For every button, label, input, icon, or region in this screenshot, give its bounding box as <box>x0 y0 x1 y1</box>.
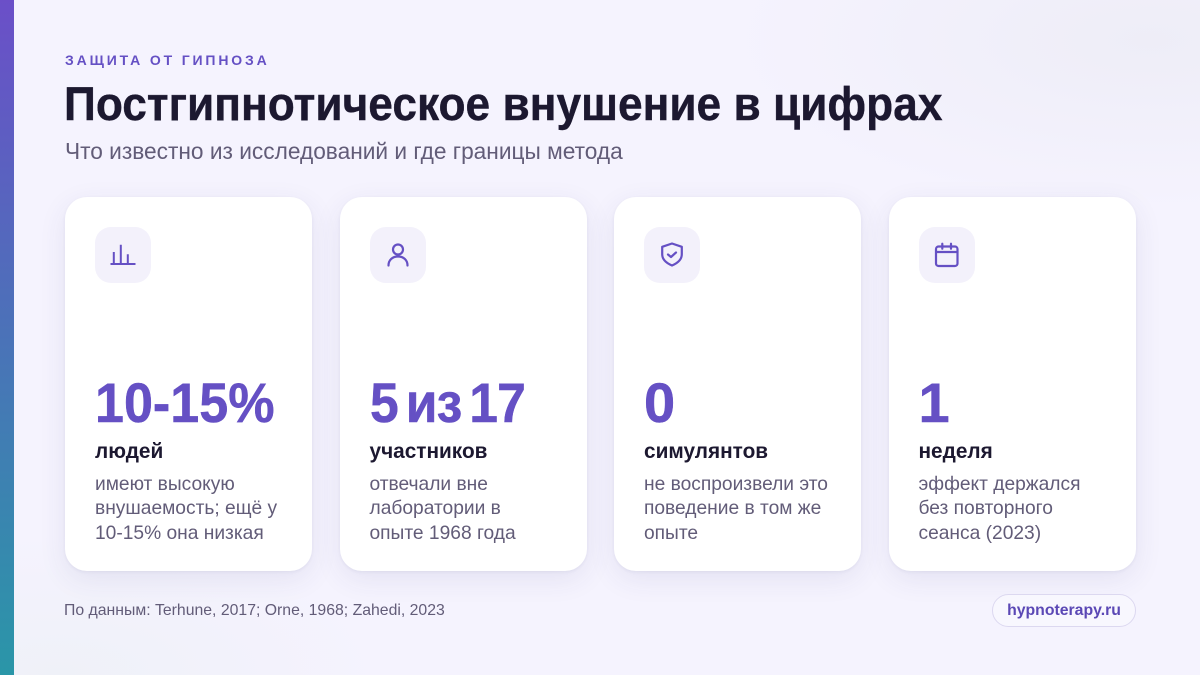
description: внушаемость; ещё у <box>95 498 277 519</box>
description: 10-15% она низкая <box>95 523 264 544</box>
eyebrow label: ЗАЩИТА ОТ ГИПНОЗА <box>65 52 270 68</box>
icon: bar chart <box>95 227 151 283</box>
description: поведение в том же <box>644 498 821 519</box>
panel: card 1 <box>65 197 312 571</box>
title: Постгипнотическое внушение в цифрах <box>64 77 942 130</box>
stat: 10-15%: 10-15% <box>95 371 275 434</box>
website badge: hypnoterapy.ru <box>1007 602 1121 619</box>
label: неделя: неделя <box>918 440 993 463</box>
subtitle: Что известно из исследований и где границы метода <box>65 138 623 164</box>
icon: shield with check <box>644 227 700 283</box>
stat: 0: 0 <box>644 371 675 434</box>
description: лаборатории в <box>370 498 501 519</box>
icon: person <box>370 227 426 283</box>
label: людей: людей <box>95 440 163 463</box>
description: опыте 1968 года <box>370 523 516 544</box>
panel: card 4 <box>888 197 1136 571</box>
stat: 1: 1 <box>918 371 950 434</box>
stat: 5 из 17: 5 из 17 <box>370 371 524 434</box>
description: не воспроизвели это <box>644 474 828 495</box>
description: опыте <box>644 523 698 544</box>
panel: card 2 <box>340 197 586 571</box>
source note: По данным: Terhune, 2017; Orne, 1968; Zahedi, 2023 <box>64 602 445 619</box>
description <box>644 474 828 544</box>
description: отвечали вне <box>370 474 488 495</box>
description: сеанса (2023) <box>918 523 1041 544</box>
gradient side bar <box>0 0 14 675</box>
description <box>918 474 1080 544</box>
description <box>95 474 277 544</box>
icon: calendar <box>918 227 974 283</box>
panel: card 3 <box>614 197 861 571</box>
label: участников: участников <box>370 440 487 463</box>
label: симулянтов: симулянтов <box>644 440 768 463</box>
website badge <box>992 594 1136 627</box>
description: эффект держался <box>918 474 1080 495</box>
description <box>370 474 516 544</box>
description: имеют высокую <box>95 474 235 495</box>
description: без повторного <box>918 498 1053 519</box>
